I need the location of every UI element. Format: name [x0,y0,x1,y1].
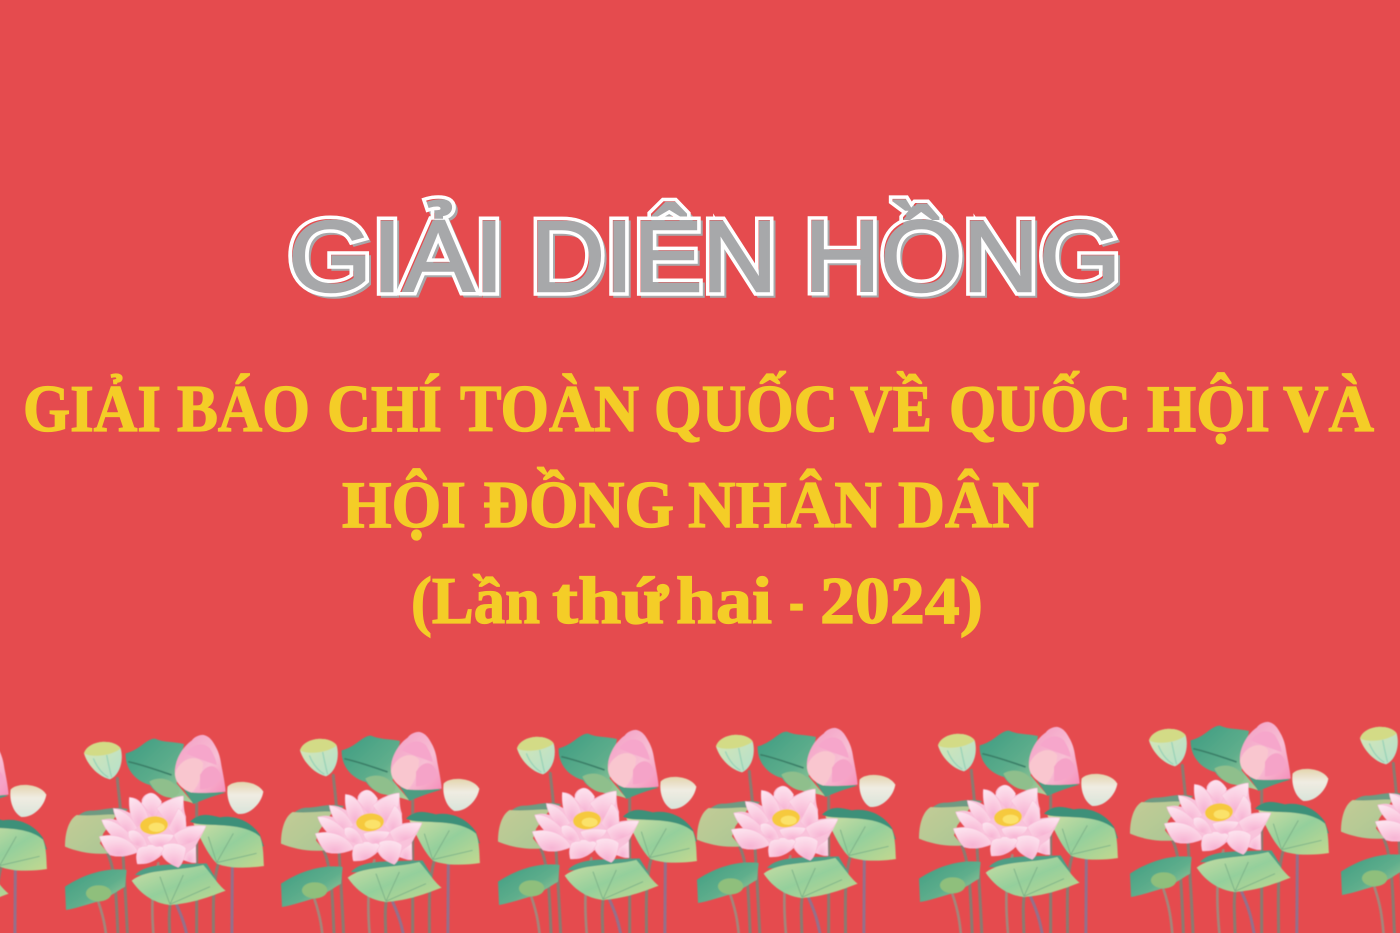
subtitle line 3 [411,564,983,638]
lotus border [0,720,1400,933]
subtitle line 3: 2024) [820,564,983,638]
title: Giải Diên Hồng: HỒNG [807,204,1124,316]
subtitle line 1: TOÀN [460,372,639,446]
subtitle line 3: (Lần [411,564,540,638]
subtitle line 2: DÂN [898,468,1039,542]
subtitle line 3: hai [676,564,772,638]
subtitle line 2: HỘI [342,468,466,542]
lotus cluster 0 [0,738,47,933]
subtitle line 3: thứ [552,564,669,638]
subtitle line 2: NHÂN [688,468,882,542]
subtitle line 2: ĐỒNG [483,466,674,542]
subtitle line 1: VÀ [1283,372,1374,446]
title: Giải Diên Hồng: GIẢI [291,204,507,316]
subtitle line 2 [342,466,1039,542]
lotus cluster 1 [65,735,264,933]
poster canvas [0,195,1400,933]
title: Giải Diên Hồng: DIÊN [533,204,780,316]
subtitle line 1: QUỐC [949,370,1131,446]
lotus cluster 4 [697,728,896,933]
subtitle line 1: VỀ [850,370,932,446]
lotus cluster 2 [281,732,480,933]
subtitle line 1: GIẢI [23,372,161,446]
lotus cluster 3 [498,730,697,933]
lotus cluster 6 [1130,722,1329,933]
subtitle line 3: - [789,564,804,638]
subtitle line 1: QUỐC [654,370,838,446]
title: Giải Diên Hồng [288,195,1120,299]
subtitle line 1: CHÍ [327,372,442,446]
subtitle line 1 [23,370,1374,446]
lotus cluster 7 [1341,720,1400,933]
lotus cluster 5 [919,727,1118,933]
subtitle line 1: BÁO [177,372,310,446]
subtitle line 1: HỘI [1147,372,1270,446]
